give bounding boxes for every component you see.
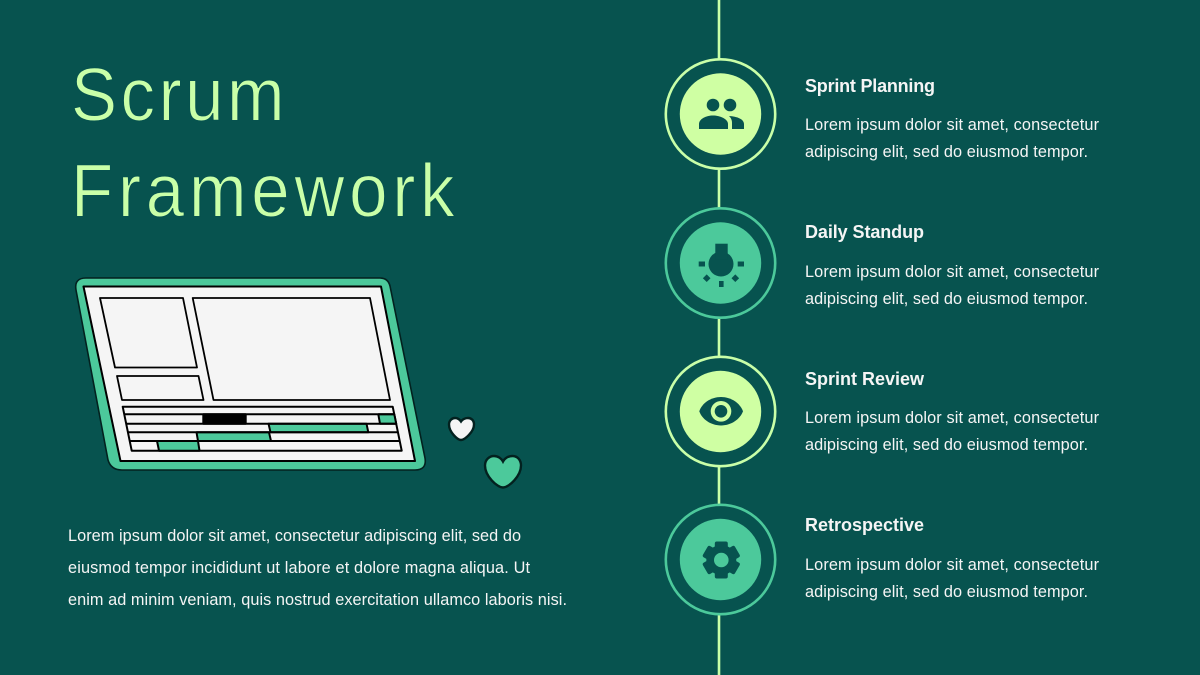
step 3 text: Lorem ipsum dolor sit amet, consectetur bbox=[805, 409, 1100, 427]
icon: people bbox=[699, 99, 744, 129]
title bbox=[71, 54, 456, 233]
step 2: daily standup node bbox=[666, 208, 775, 318]
intro paragraph: eiusmod tempor incididunt ut labore et dolore magna aliqua. Ut bbox=[68, 559, 530, 577]
step 4 text bbox=[805, 515, 1100, 601]
step 1: sprint planning node bbox=[666, 59, 775, 169]
step 4 text: Lorem ipsum dolor sit amet, consectetur bbox=[805, 556, 1100, 574]
tablet frame bbox=[76, 278, 425, 470]
step 3 text: adipiscing elit, sed do eiusmod tempor. bbox=[805, 436, 1088, 454]
panel: top right bbox=[193, 298, 390, 400]
intro paragraph: Lorem ipsum dolor sit amet, consectetur adipiscing elit, sed do bbox=[68, 527, 521, 545]
step 4 text: Retrospective bbox=[805, 515, 924, 535]
step 1 text: adipiscing elit, sed do eiusmod tempor. bbox=[805, 143, 1088, 161]
intro paragraph: enim ad minim veniam, quis nostrud exercitation ullamco laboris nisi. bbox=[68, 591, 567, 609]
icon: eye bbox=[699, 397, 743, 426]
step 1 text: Sprint Planning bbox=[805, 76, 935, 96]
title: Framework bbox=[71, 150, 456, 233]
step 3: sprint review node bbox=[666, 357, 775, 466]
step 3 text bbox=[805, 369, 1100, 454]
timeline line bbox=[718, 0, 720, 675]
step 1 text: Lorem ipsum dolor sit amet, consectetur bbox=[805, 116, 1100, 134]
step 3 text: Sprint Review bbox=[805, 369, 925, 389]
step 2 text: Lorem ipsum dolor sit amet, consectetur bbox=[805, 263, 1100, 281]
tablet screen bbox=[84, 286, 415, 461]
panel: small bbox=[117, 376, 204, 400]
step 4: retrospective node bbox=[666, 505, 775, 614]
intro paragraph bbox=[68, 527, 567, 609]
icon: gear bbox=[702, 542, 741, 578]
panel: top left bbox=[100, 298, 197, 368]
icon: light bulb bbox=[699, 244, 744, 287]
step 4 text: adipiscing elit, sed do eiusmod tempor. bbox=[805, 583, 1088, 601]
title: Scrum bbox=[71, 54, 284, 137]
illustration: dashboard tablet bbox=[76, 278, 425, 470]
step 2 text: adipiscing elit, sed do eiusmod tempor. bbox=[805, 290, 1088, 308]
icon: white heart bbox=[449, 418, 474, 440]
step 2 text bbox=[805, 222, 1100, 308]
table grid bbox=[123, 407, 402, 451]
step 2 text: Daily Standup bbox=[805, 222, 924, 242]
icon: green heart bbox=[485, 456, 521, 488]
step 1 text bbox=[805, 76, 1100, 161]
